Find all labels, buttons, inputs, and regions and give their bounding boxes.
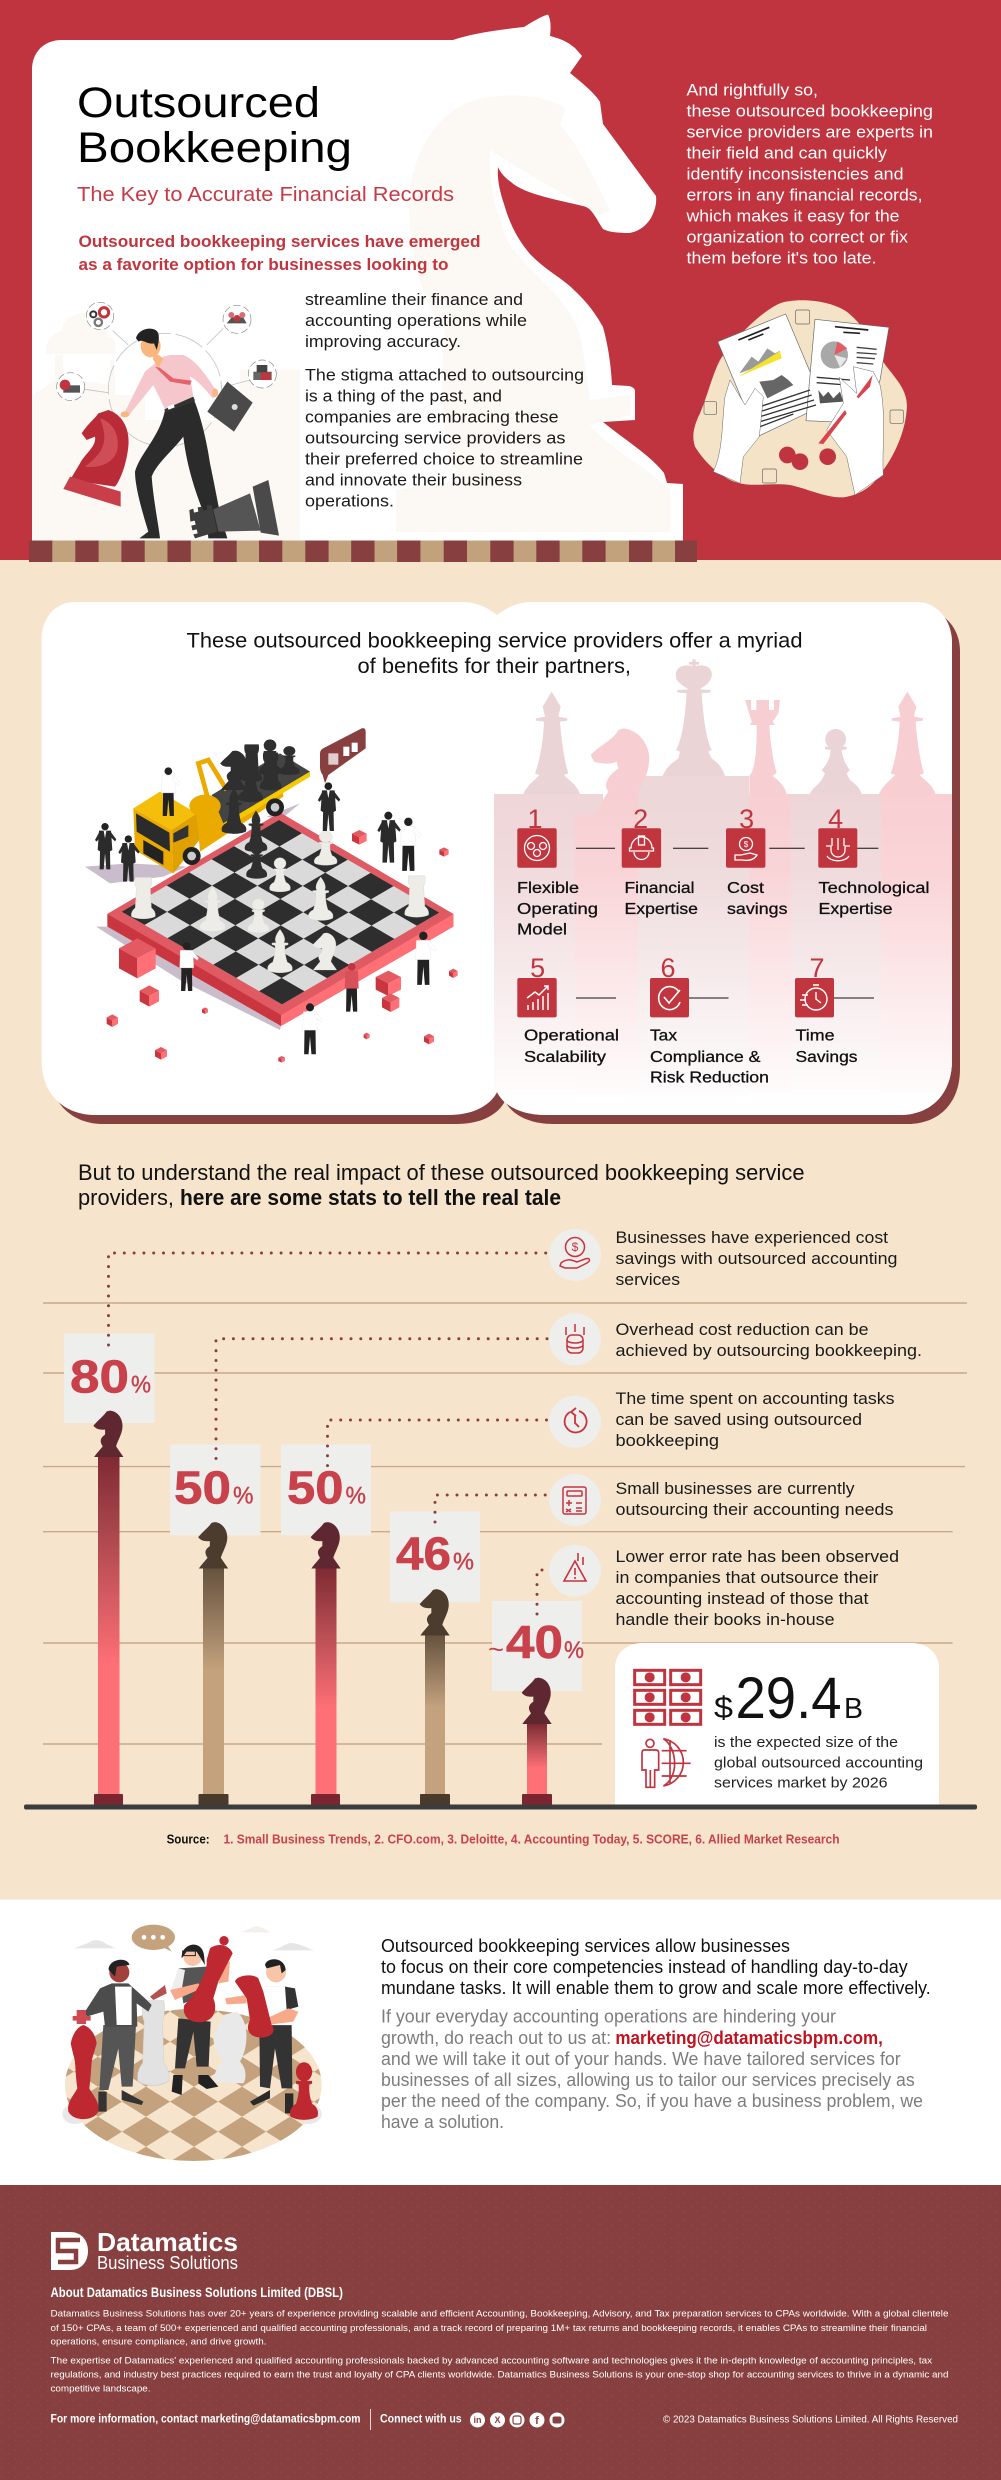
- benefit 1: Model: [517, 922, 567, 939]
- benefit 6: Tax: [650, 1028, 677, 1045]
- stat 4 text and icon: Small businesses are currently: [616, 1479, 855, 1498]
- intro body text: their preferred choice to streamline: [305, 451, 583, 469]
- benefit 1: Flexible: [517, 880, 579, 897]
- stat 3 text and icon: The time spent on accounting tasks: [616, 1389, 894, 1408]
- stat 1 text and icon: Businesses have experienced cost: [616, 1228, 888, 1247]
- white card with knight silhouette: [32, 14, 683, 541]
- benefit 6: 6: [660, 953, 676, 983]
- heading: Bookkeeping: [77, 124, 352, 172]
- stat 2 text and icon: [549, 1313, 922, 1365]
- stat 3 text and icon: bookkeeping: [616, 1431, 719, 1450]
- benefit 4: Expertise: [818, 901, 893, 918]
- panel: footer: [0, 2185, 1001, 2480]
- about text: regulations, and industry best practices required to earn the trust and loyalty of CPA clients worldwide. Datamatics Business Solutions is your one-stop shop for accounting services to thrive in a dynamic and: [50, 2370, 948, 2380]
- intro body text: streamline their finance and: [305, 291, 523, 309]
- intro body text: outsourcing service providers as: [305, 430, 566, 448]
- stat 2 text and icon: achieved by outsourcing bookkeeping.: [616, 1341, 922, 1360]
- logo: Datamatics: [97, 2227, 238, 2257]
- market value: B: [844, 1693, 863, 1725]
- contact line: [50, 2409, 462, 2430]
- benefit 6: [650, 953, 769, 1086]
- market size card: [615, 1643, 939, 1805]
- benefit 4: Technological: [818, 880, 930, 897]
- benefit 5: [517, 953, 619, 1066]
- illustration: businessman moving chess pieces: [57, 302, 279, 538]
- intro body text: operations.: [305, 493, 394, 511]
- intro bold: as a favorite option for businesses looking to: [78, 256, 448, 274]
- stat 5 text and icon: in companies that outsource their: [616, 1568, 879, 1587]
- benefit 1: [517, 804, 615, 939]
- stat column 50% tan: [174, 1461, 254, 1805]
- right text: organization to correct or fix: [686, 229, 909, 247]
- benefit 5: 5: [530, 953, 545, 983]
- benefit 7: Time: [796, 1028, 835, 1045]
- about text: operations, ensure compliance, and drive growth.: [50, 2337, 266, 2348]
- benefit 7: Savings: [796, 1049, 858, 1066]
- chart baseline: [24, 1804, 977, 1810]
- right text: them before it's too late.: [686, 250, 876, 268]
- social icons: f: [535, 2415, 539, 2427]
- illustration: isometric chessboard with truck: [85, 728, 458, 1063]
- stat column 40%: [488, 1616, 584, 1805]
- book shadow: [50, 611, 960, 1124]
- stat column 50% red: [287, 1461, 366, 1805]
- stat column 40%: %: [564, 1637, 584, 1664]
- right text: errors in any financial records,: [686, 187, 922, 205]
- stats heading: providers,: [78, 1185, 174, 1210]
- faint knight and city backdrop: [33, 96, 670, 540]
- subtitle: The Key to Accurate Financial Records: [77, 184, 454, 206]
- benefit 5: Scalability: [524, 1049, 606, 1066]
- stat 5 text and icon: Lower error rate has been observed: [616, 1547, 899, 1566]
- book pages: [42, 602, 952, 1115]
- intro body text: accounting operations while: [305, 312, 527, 330]
- stat 4 text and icon: [549, 1474, 894, 1526]
- right text: service providers are experts in: [686, 124, 933, 142]
- panel: closing message: [0, 1900, 1001, 2186]
- market value: $: [714, 1690, 733, 1725]
- benefit 3: $: [744, 840, 749, 849]
- stat 3 text and icon: [549, 1389, 894, 1450]
- stat column 50% tan: 50: [174, 1461, 231, 1513]
- social icons: [470, 2412, 564, 2428]
- stat column 46%: [396, 1527, 474, 1805]
- benefit 1: 1: [527, 804, 543, 834]
- red hero background: [0, 0, 1001, 560]
- chess silhouettes and gradient panel: [494, 659, 952, 1116]
- stat 1 text and icon: savings with outsourced accounting: [616, 1249, 898, 1268]
- intro body text: companies are embracing these: [305, 409, 558, 427]
- stat column 50% red: 50: [287, 1461, 344, 1513]
- dotted connectors: [108, 1253, 549, 1614]
- market value: 29.4: [736, 1666, 842, 1731]
- benefit 2: Expertise: [624, 901, 698, 918]
- stat column 50% red: %: [346, 1482, 366, 1509]
- intro body text: improving accuracy.: [305, 333, 461, 351]
- heading: [186, 629, 802, 678]
- call to action: businesses of all sizes, allowing us to tailor our services precisely as: [381, 2070, 915, 2090]
- stats heading: [78, 1160, 804, 1210]
- benefit 4: [818, 804, 930, 918]
- benefit 2: Financial: [624, 880, 694, 897]
- market description: is the expected size of the: [714, 1734, 898, 1751]
- call to action: growth, do reach out to us at:: [381, 2028, 611, 2048]
- logo: [51, 2227, 238, 2273]
- heading: These outsourced bookkeeping service providers offer a myriad: [186, 629, 802, 652]
- panel: stats: [24, 1160, 977, 1847]
- stat boxes: [64, 1334, 582, 1691]
- about text: competitive landscape.: [50, 2384, 150, 2395]
- right text: which makes it easy for the: [685, 208, 900, 226]
- stat column 80%: [70, 1350, 151, 1805]
- benefit 7: 7: [809, 953, 825, 983]
- market description: [714, 1734, 923, 1792]
- stat column 40%: 40: [506, 1616, 563, 1668]
- intro body text: is a thing of the past, and: [305, 388, 502, 406]
- benefit 1: Operating: [517, 901, 598, 918]
- call to action: [381, 2007, 923, 2132]
- stat 1 text and icon: [549, 1228, 898, 1289]
- market description: services market by 2026: [714, 1774, 888, 1792]
- stat 4 text and icon: outsourcing their accounting needs: [616, 1500, 894, 1519]
- stat 5 text and icon: accounting instead of those that: [616, 1589, 869, 1608]
- icon: person and globe: [642, 1739, 691, 1787]
- contact line: Connect with us: [380, 2412, 462, 2426]
- stat column 46%: %: [453, 1548, 474, 1575]
- about heading: About Datamatics Business Solutions Limited (DBSL): [50, 2284, 343, 2300]
- about text: [50, 2309, 948, 2395]
- intro body text: [305, 291, 584, 511]
- contact line: For more information, contact marketing@datamaticsbpm.com: [50, 2412, 360, 2426]
- closing statement: to focus on their core competencies instead of handling day-to-day: [381, 1957, 908, 1977]
- benefit 2: [622, 804, 708, 918]
- right text: their field and can quickly: [686, 145, 888, 163]
- stat 1 text and icon: $: [572, 1240, 579, 1254]
- stat column 80%: %: [131, 1372, 151, 1398]
- call to action: and we will take it out of your hands. We have tailored services for: [381, 2049, 901, 2069]
- right text: [685, 82, 933, 268]
- about text: of 150+ CPAs, a team of 500+ experienced and qualified accounting professionals, and a track record of preparing 1M+ tax returns and bookkeeping records, it enables CPAs to streamline their financial: [50, 2323, 927, 2334]
- benefit 6: Risk Reduction: [650, 1070, 769, 1086]
- benefit 7: [795, 953, 874, 1066]
- stat 3 text and icon: can be saved using outsourced: [616, 1410, 862, 1429]
- heading: Outsourced: [77, 79, 320, 127]
- stat column 80%: 80: [70, 1350, 129, 1402]
- stats heading: here are some stats to tell the real tale: [180, 1185, 561, 1210]
- closing statement: mundane tasks. It will enable them to grow and scale more effectively.: [381, 1978, 931, 1998]
- sources: Source:: [167, 1833, 210, 1847]
- stat 5 text and icon: [549, 1545, 899, 1629]
- stat column 50% tan: %: [233, 1482, 254, 1509]
- intro body text: The stigma attached to outsourcing: [305, 367, 584, 385]
- intro bold: Outsourced bookkeeping services have emerged: [78, 233, 480, 251]
- call to action: marketing@datamaticsbpm.com,: [615, 2028, 883, 2048]
- benefit 6: Compliance &: [650, 1049, 761, 1066]
- call to action: If your everyday accounting operations are hindering your: [381, 2007, 836, 2027]
- social icons: X: [494, 2415, 501, 2425]
- intro bold: [78, 233, 480, 274]
- closing statement: [381, 1936, 931, 1998]
- about text: Datamatics Business Solutions has over 20+ years of experience providing scalable and efficient Accounting, Bookkeeping, Advisory, and Tax preparation services to CPAs worldwide. With a global clientele: [50, 2309, 948, 2320]
- logo: Business Solutions: [97, 2253, 238, 2273]
- right text: identify inconsistencies and: [686, 166, 904, 184]
- heading: [77, 79, 352, 172]
- sources: 1. Small Business Trends, 2. CFO.com, 3. Deloitte, 4. Accounting Today, 5. SCORE, 6. Allied Market Research: [224, 1833, 840, 1847]
- illustration: team with chess pieces: [62, 1925, 322, 2161]
- checker strip: [29, 540, 697, 562]
- illustration: hands reviewing financial reports: [693, 300, 907, 497]
- benefit 3: 3: [739, 804, 754, 834]
- stats heading: But to understand the real impact of these outsourced bookkeeping service: [78, 1160, 804, 1185]
- icon: banknotes: [635, 1670, 701, 1724]
- panel: benefits book: [42, 602, 960, 1124]
- stat column 46%: 46: [396, 1527, 451, 1579]
- benefit 3: savings: [727, 901, 788, 918]
- market description: global outsourced accounting: [714, 1755, 923, 1772]
- stat 1 text and icon: services: [616, 1270, 680, 1289]
- heading: of benefits for their partners,: [358, 655, 631, 678]
- stat column 40%: ~: [488, 1634, 504, 1664]
- benefit 2: 2: [633, 804, 648, 834]
- stat 2 text and icon: Overhead cost reduction can be: [616, 1320, 868, 1339]
- right text: And rightfully so,: [686, 82, 818, 100]
- benefit 4: 4: [828, 804, 843, 834]
- call to action: have a solution.: [381, 2112, 504, 2132]
- stat 5 text and icon: handle their books in-house: [616, 1610, 834, 1629]
- closing statement: Outsourced bookkeeping services allow businesses: [381, 1936, 790, 1956]
- benefit 5: Operational: [524, 1028, 619, 1045]
- copyright: © 2023 Datamatics Business Solutions Limited. All Rights Reserved: [663, 2414, 958, 2426]
- intro body text: and innovate their business: [305, 472, 522, 490]
- benefit 3: Cost: [727, 880, 765, 897]
- social icons: in: [474, 2415, 482, 2425]
- panel: hero section: [0, 0, 1001, 562]
- about text: The expertise of Datamatics' experienced and qualified accounting professionals backed by advanced accounting software and technologies gives it the in-depth knowledge of accounting principles, tax: [50, 2356, 932, 2367]
- call to action: per the need of the company. So, if you have a business problem, we: [381, 2091, 923, 2111]
- right text: these outsourced bookkeeping: [686, 103, 933, 121]
- benefit 3: [726, 804, 805, 918]
